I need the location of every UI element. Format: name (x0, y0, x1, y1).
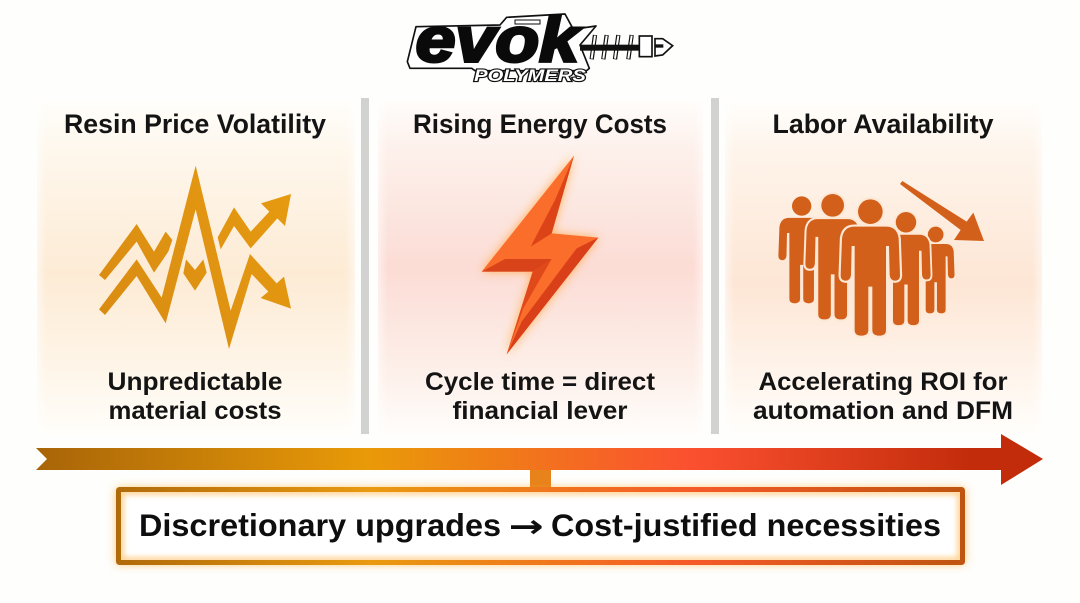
text: cycle time equals direct financial lever (425, 368, 656, 425)
text: unpredictable material costs: material costs (108, 397, 282, 425)
text: cycle time equals direct financial lever: Cycle time = direct (425, 368, 656, 396)
divider left (361, 98, 369, 434)
logo: evok polymers (407, 5, 673, 85)
icon: lightning bolt (482, 156, 598, 354)
heading: resin price volatility: Resin Price Volatility (64, 109, 326, 139)
logo screw icon (580, 35, 673, 59)
icon: shrinking workforce with down arrow (778, 181, 984, 336)
text: unpredictable material costs (108, 368, 283, 425)
callout: discretionary upgrades to cost-justified necessities: Cost-justified necessities (551, 507, 941, 543)
callout glow (116, 488, 965, 564)
text: accelerating roi: Accelerating ROI for (758, 368, 1008, 396)
panel: rising energy costs (378, 100, 703, 435)
heading: rising energy costs: Rising Energy Costs (413, 109, 667, 139)
panel: labor availability (725, 100, 1042, 435)
callout: discretionary upgrades to cost-justified necessities (118, 490, 962, 562)
divider right (711, 98, 719, 434)
callout: discretionary upgrades to cost-justified necessities: Discretionary upgrades (139, 507, 501, 543)
text: cycle time equals direct financial lever: financial lever (452, 397, 628, 425)
text: accelerating roi (753, 368, 1013, 425)
connector (530, 470, 551, 488)
heading: labor availability: Labor Availability (772, 109, 994, 139)
callout: discretionary upgrades to cost-justified necessities: → (508, 509, 544, 545)
icon: volatile price lines with arrows (99, 166, 291, 349)
panel: resin price volatility (37, 100, 355, 435)
text: accelerating roi: automation and DFM (753, 397, 1013, 425)
arrow: progress flow (36, 434, 1043, 485)
text: unpredictable material costs: Unpredictable (108, 368, 283, 396)
logo: evok polymers: POLYMERS (474, 66, 586, 85)
logo: evok polymers: evok (416, 5, 582, 75)
